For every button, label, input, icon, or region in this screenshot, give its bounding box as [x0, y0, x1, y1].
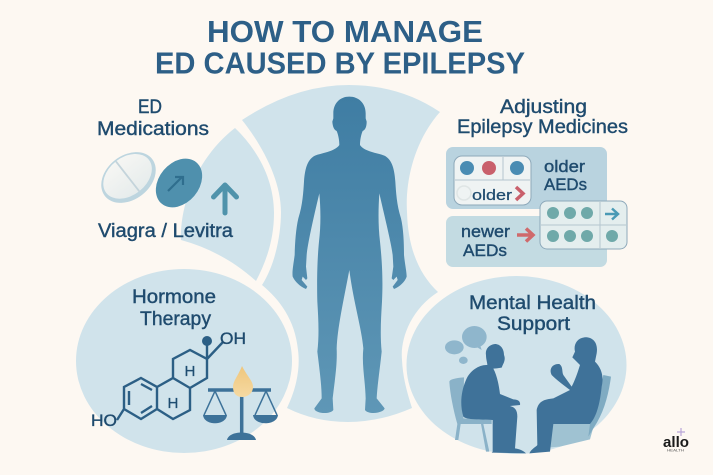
heading: hormone therapy: Hormone [132, 287, 216, 308]
panel: central body background [242, 85, 440, 422]
blister pack: older [454, 156, 531, 205]
chemical structure: estradiol: H [168, 395, 178, 412]
title: ED CAUSED BY EPILEPSY [155, 46, 525, 80]
icon: red arrow [517, 228, 533, 242]
illustration: counselling scene [445, 326, 611, 453]
title: HOW TO MANAGE [207, 14, 483, 49]
heading: mental health support: Support [497, 314, 571, 335]
chemical structure: estradiol [91, 329, 246, 430]
title [155, 14, 525, 80]
chemical structure: estradiol: OH [220, 329, 246, 348]
panel: hormone therapy circle [76, 269, 292, 453]
heading: adjusting epilepsy medicines: Adjusting [500, 97, 587, 118]
human body silhouette [292, 97, 407, 413]
icon: thought bubbles [445, 326, 487, 364]
heading: mental health support: Mental Health [469, 293, 596, 314]
panel: older AEDs: older [544, 157, 585, 176]
chair: right [550, 375, 611, 447]
blister pack: older: older [472, 187, 512, 204]
icon: gold drop [233, 366, 253, 397]
heading: hormone therapy [132, 287, 216, 330]
icon: white pill [91, 142, 166, 213]
chemical structure: estradiol: H [184, 363, 195, 380]
logo: allo health: HEALTH [667, 448, 685, 452]
panel: older AEDs: AEDs [544, 175, 587, 194]
panel: newer AEDs: AEDs [463, 241, 507, 260]
panel: newer AEDs [446, 201, 627, 267]
panel: older AEDs [446, 147, 607, 209]
heading: adjusting epilepsy medicines: Epilepsy Medicines [457, 117, 628, 138]
label: Viagra / Levitra: Viagra / Levitra [98, 221, 233, 242]
heading: hormone therapy: Therapy [140, 309, 212, 330]
panel: newer AEDs: newer [461, 222, 510, 241]
icon: up arrow [214, 185, 236, 213]
heading: ED medications [97, 97, 209, 140]
person: right [529, 337, 603, 453]
logo: allo health [663, 428, 689, 452]
chemical structure: estradiol: HO [91, 411, 117, 430]
chair: left [449, 377, 492, 452]
heading: ED medications: ED [138, 97, 162, 118]
logo: allo health: allo [663, 434, 689, 451]
panel: mental health circle [406, 276, 626, 454]
person: left [461, 344, 526, 453]
panel: ED medications arc [181, 128, 274, 281]
blister pack: newer [540, 201, 627, 249]
heading: ED medications: Medications [97, 119, 209, 140]
heading: mental health support [469, 293, 596, 335]
icon: blue pill [146, 149, 212, 217]
heading: adjusting epilepsy medicines [457, 97, 628, 138]
icon: balance scale with hormone drop [203, 366, 278, 440]
